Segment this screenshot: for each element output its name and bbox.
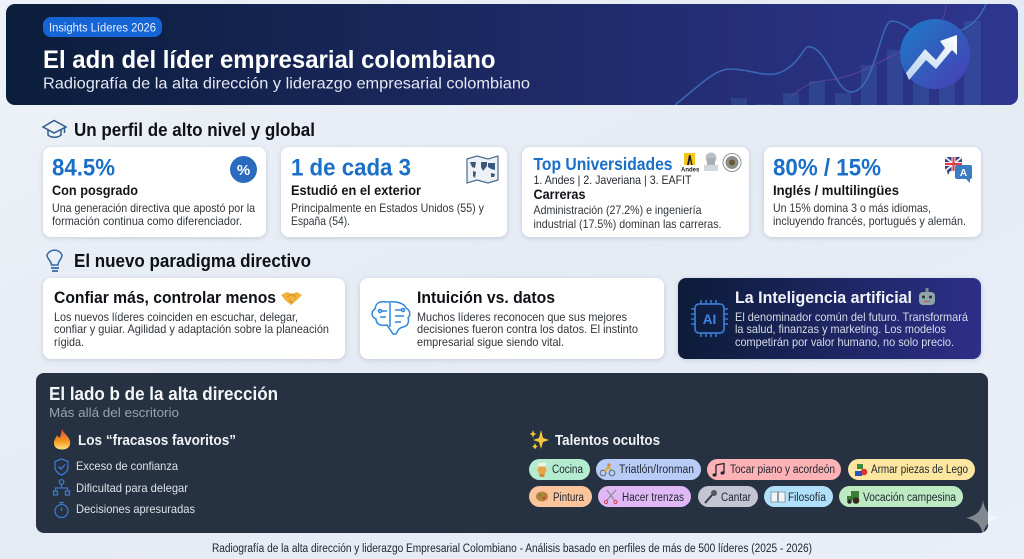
subtitle: Radiografía de la alta dirección y liderazgo empresarial colombiano <box>43 76 530 92</box>
icon: EAFIT seal <box>723 154 741 172</box>
pill: cocina <box>529 459 590 480</box>
card: exterior: Estudió en el exterior <box>291 182 422 198</box>
pill: cantar: Cantar <box>721 492 751 504</box>
footer: Radiografía de la alta dirección y liderazgo Empresarial Colombiano - Análisis basado en perfiles de más de 500 líderes (2025 - 2026) <box>212 543 812 555</box>
icon: Andes logo <box>681 153 700 174</box>
header banner <box>6 4 1018 105</box>
panel: el lado b <box>36 373 988 533</box>
list: fracasos favoritos: Exceso de confianza <box>76 459 178 473</box>
icon: light bulb <box>47 250 62 271</box>
icon: language bubbles <box>945 157 972 183</box>
icon: graduation cap <box>43 120 66 137</box>
icon: Javeriana seal <box>704 152 718 171</box>
icon: Andes logo: Andes <box>681 168 700 174</box>
card: universidades: Carreras <box>534 186 586 202</box>
card: intuicion: Muchos líderes reconocen que sus mejores <box>417 310 627 324</box>
card: posgrado <box>43 147 266 237</box>
card: universidades: Top Universidades <box>534 154 673 174</box>
card: exterior: España (54). <box>291 214 350 228</box>
card: inteligencia artificial: La Inteligencia artificial <box>735 289 912 307</box>
card: exterior: Principalmente en Estados Unidos (55) y <box>291 201 484 215</box>
panel subheading: Más allá del escritorio <box>49 405 179 420</box>
card: universidades: Administración (27.2%) e ingeniería <box>534 203 702 217</box>
card: inteligencia artificial: competirán por valor humano, no solo precio. <box>735 335 954 349</box>
card: exterior <box>281 147 507 237</box>
icon: brain circuit <box>372 302 410 334</box>
pill: lego <box>848 459 975 480</box>
card: idiomas: 80% / 15% <box>773 154 881 182</box>
card: idiomas: Un 15% domina 3 o más idiomas, <box>773 201 931 215</box>
card: confiar: rígida. <box>54 335 84 349</box>
pill: triatlon <box>596 459 701 480</box>
card: universidades: industrial (17.5%) dominan las carreras. <box>534 217 722 231</box>
card: posgrado: formación continua como diferenciador. <box>52 214 242 228</box>
card: posgrado: Una generación directiva que apostó por la <box>52 201 255 215</box>
icon: world map <box>467 156 498 183</box>
pill: vocacion campesina <box>839 486 963 507</box>
icon: handshake <box>281 292 302 305</box>
pill: pintura: Pintura <box>553 492 585 504</box>
talentos ocultos: Talentos ocultos <box>555 433 660 449</box>
icon: AI chip: AI <box>703 312 716 327</box>
card: confiar: Confiar más, controlar menos <box>54 289 276 307</box>
icon: language bubbles: A <box>960 168 967 179</box>
section heading: paradigma: El nuevo paradigma directivo <box>74 251 311 271</box>
talentos ocultos <box>529 430 975 507</box>
header chart decoration <box>675 4 986 105</box>
card: intuicion: empresarial sigue siendo vital. <box>417 335 564 349</box>
card: inteligencia artificial: El denominador común del futuro. Transformará <box>735 310 968 324</box>
card: posgrado: 84.5% <box>52 154 115 182</box>
icon: percent badge <box>230 156 257 183</box>
pill: filosofia: Filosofía <box>788 492 827 504</box>
card: confiar <box>43 278 345 359</box>
pill: triatlon: Triatlón/Ironman <box>619 464 694 476</box>
pill: pintura <box>529 486 592 507</box>
icon: sparkles <box>530 430 549 450</box>
icon: flame <box>54 429 70 450</box>
badge <box>43 17 162 37</box>
card: universidades <box>522 147 749 237</box>
card: exterior: 1 de cada 3 <box>291 154 411 182</box>
pill: cocina: Cocina <box>552 464 584 476</box>
pill: cantar <box>698 486 758 507</box>
pill: trenzas <box>598 486 691 507</box>
icon: shield <box>55 459 68 475</box>
list: fracasos favoritos: Dificultad para delegar <box>76 481 188 495</box>
list: fracasos favoritos: Decisiones apresuradas <box>76 502 195 516</box>
pill: trenzas: Hacer trenzas <box>622 492 684 504</box>
card: idiomas: Inglés / multilingües <box>773 182 899 198</box>
card: posgrado: Con posgrado <box>52 182 138 198</box>
card: intuicion: Intuición vs. datos <box>417 289 555 307</box>
pill: filosofia <box>764 486 833 507</box>
title: El adn del líder empresarial colombiano <box>43 46 496 74</box>
decoration: spark star <box>966 500 1000 536</box>
badge: Insights Líderes 2026 <box>49 22 156 34</box>
card: confiar: Los nuevos líderes coinciden en escuchar, delegar, <box>54 310 298 324</box>
pill: vocacion campesina: Vocación campesina <box>863 492 957 504</box>
icon: robot <box>919 288 935 305</box>
card: inteligencia artificial: la salud, finanzas y marketing. Los modelos <box>735 322 946 336</box>
card: idiomas: incluyendo francés, portugués y alemán. <box>773 214 966 228</box>
pill: lego: Armar piezas de Lego <box>871 464 968 476</box>
pill: piano <box>707 459 841 480</box>
card: confiar: confiar y guiar. Agilidad y adaptación sobre la planeación <box>54 322 329 336</box>
pill: piano: Tocar piano y acordeón <box>730 464 835 476</box>
panel heading: El lado b de la alta dirección <box>49 383 278 404</box>
icon: AI chip <box>691 300 728 337</box>
card: intuicion: decisiones fueron contra los datos. El instinto <box>417 322 638 336</box>
icon: growth arrow <box>900 19 970 89</box>
icon: percent badge: % <box>237 162 250 179</box>
card: intuicion <box>360 278 664 359</box>
section heading: perfil: Un perfil de alto nivel y global <box>74 120 315 140</box>
card: inteligencia artificial <box>678 278 981 359</box>
list: fracasos favoritos <box>54 429 236 518</box>
icon: org chart <box>54 480 70 495</box>
card: idiomas <box>764 147 981 237</box>
icon: stopwatch <box>55 502 68 518</box>
card: universidades: 1. Andes | 2. Javeriana | 3. EAFIT <box>534 173 692 187</box>
list: fracasos favoritos: Los “fracasos favoritos” <box>78 433 236 449</box>
